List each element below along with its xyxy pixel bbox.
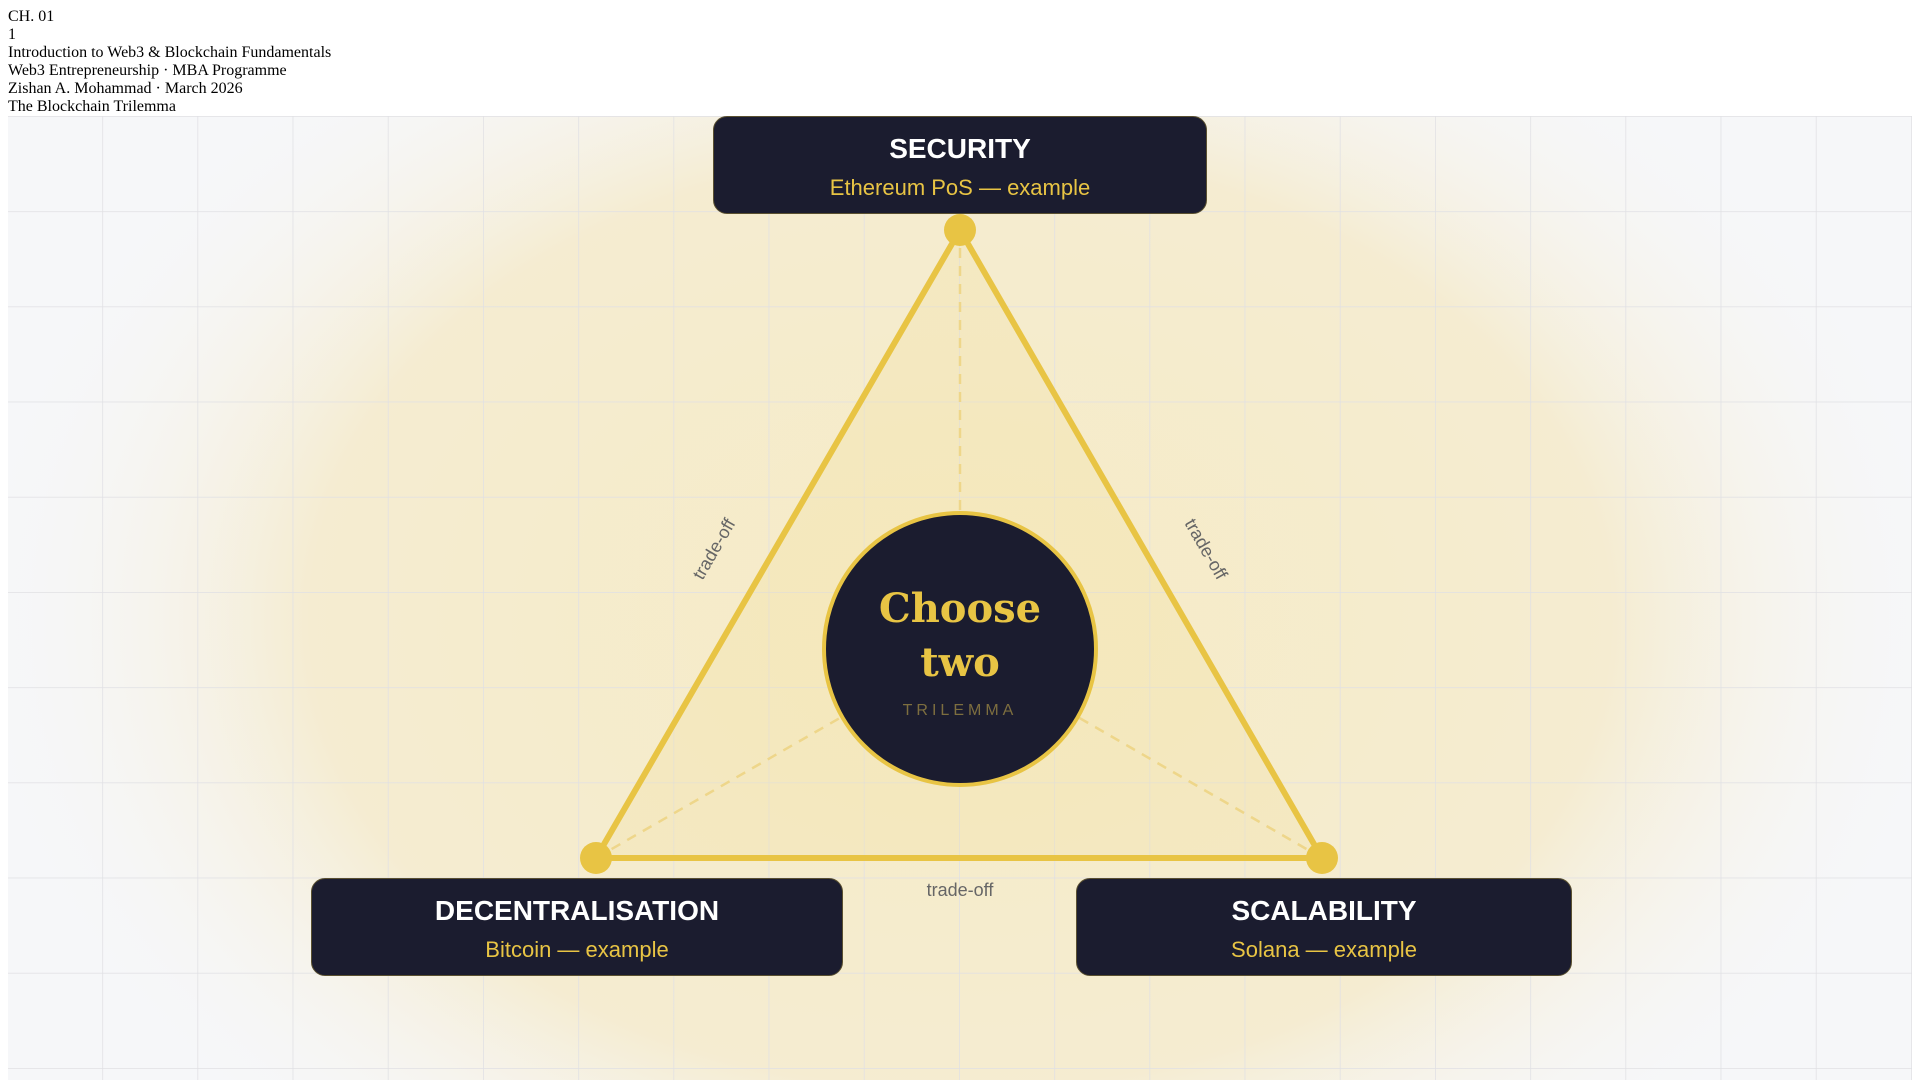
trade-off labels: trade-off	[1181, 515, 1232, 584]
center circle: choose two: TRILEMMA	[903, 702, 1017, 719]
trade-off labels: trade-off	[927, 880, 994, 900]
box: decentralisation: DECENTRALISATION	[435, 895, 719, 926]
header text block: Web3 Entrepreneurship · MBA Programme	[8, 62, 287, 79]
header text block: Introduction to Web3 & Blockchain Fundamentals	[8, 44, 331, 61]
box: security: Ethereum PoS — example	[830, 175, 1090, 200]
header text block: Zishan A. Mohammad · March 2026	[8, 80, 243, 97]
header text block: CH. 01	[8, 8, 54, 25]
box: scalability	[1076, 878, 1572, 976]
box: decentralisation: Bitcoin — example	[485, 937, 669, 962]
header text block	[8, 8, 331, 115]
trade-off labels: trade-off	[689, 514, 740, 583]
box: security	[713, 116, 1207, 214]
vertex dots	[580, 214, 1338, 874]
box: decentralisation	[311, 878, 843, 976]
box: security: SECURITY	[889, 133, 1031, 164]
center circle: choose two: two	[920, 639, 1000, 686]
trade-off labels	[689, 514, 1232, 900]
header text block: 1	[8, 26, 16, 43]
header text block: The Blockchain Trilemma	[8, 98, 176, 115]
box: scalability: SCALABILITY	[1231, 895, 1417, 926]
box: scalability: Solana — example	[1231, 937, 1417, 962]
triangle	[596, 230, 1322, 858]
center circle: choose two	[824, 513, 1096, 785]
center circle: choose two: Choose	[879, 585, 1041, 632]
